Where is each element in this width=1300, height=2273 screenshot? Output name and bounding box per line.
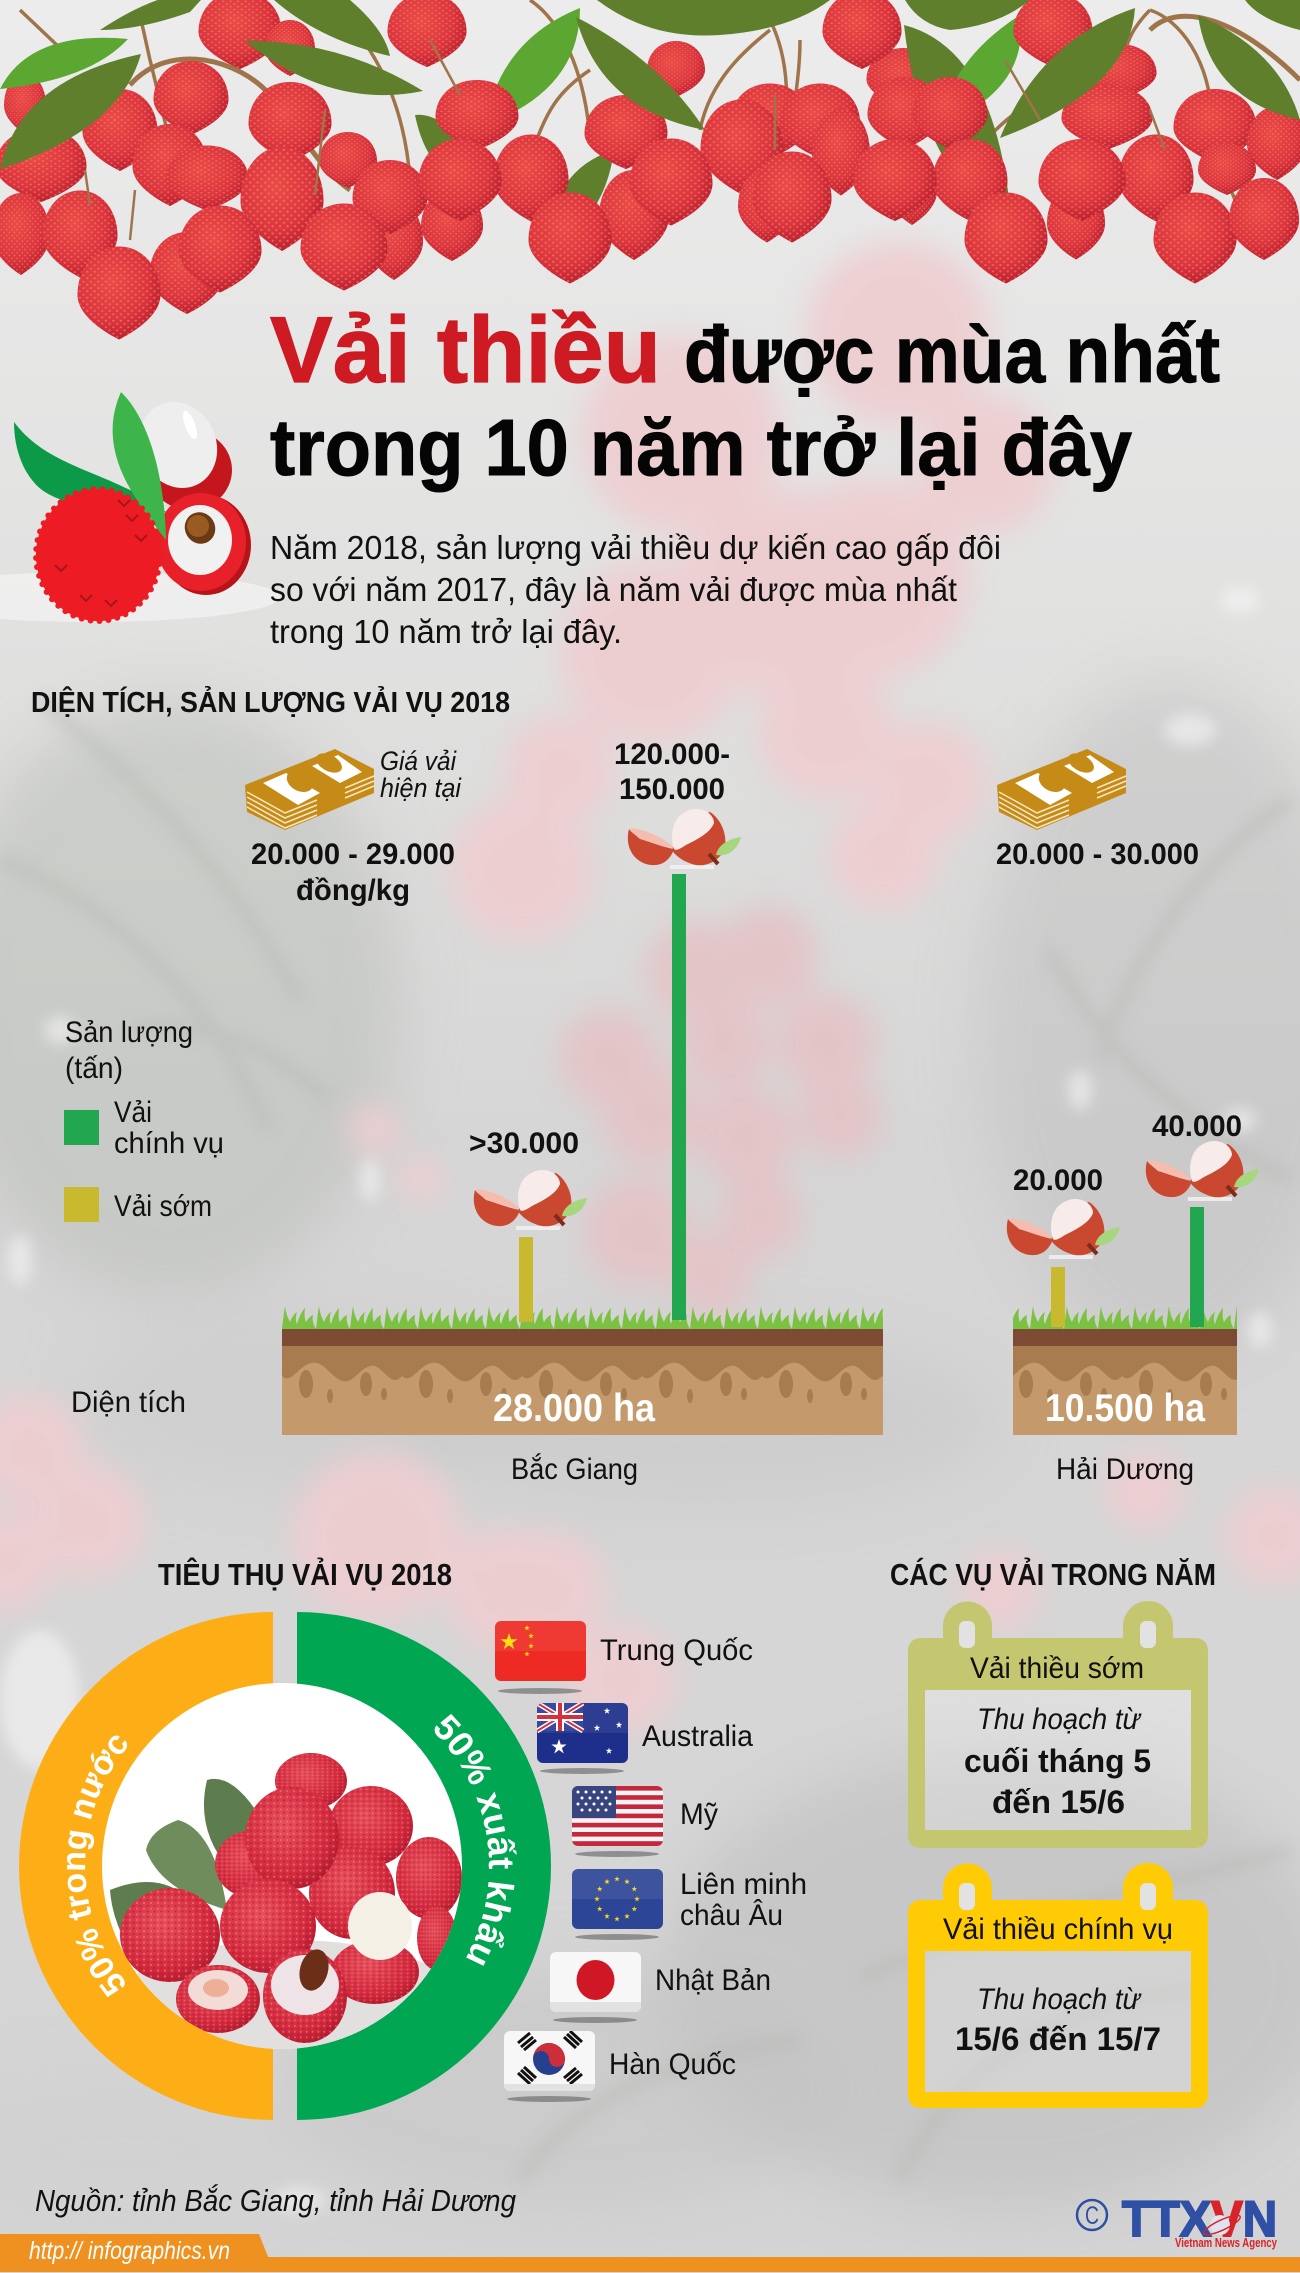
label: Trung Quốc: Trung Quốc (600, 1634, 753, 1667)
legend: chính vụ (114, 1127, 224, 1160)
area and region labels: Bắc Giang (511, 1453, 638, 1486)
calendar: early crop: cuối tháng 5 (964, 1743, 1151, 1779)
bar: Hải Dương main crop (1146, 1110, 1259, 1327)
icon: money stack left (245, 749, 374, 830)
flag: Japan (550, 1952, 641, 2023)
price block: Bắc Giang: 20.000 - 29.000 (251, 838, 455, 871)
heading: area and output: DIỆN TÍCH, SẢN LƯỢNG VẢI VỤ 2018 (31, 685, 510, 719)
label: Liên minh châu Âu (680, 1868, 807, 1932)
icon: money stack right (997, 749, 1126, 830)
intro text block (270, 529, 1001, 650)
bar: Hải Dương early crop: 20.000 (1013, 1164, 1103, 1197)
calendar: early crop: đến 15/6 (992, 1784, 1125, 1820)
area and region labels: Diện tích (71, 1386, 186, 1419)
title (270, 297, 1220, 492)
calendar: main crop: Thu hoạch từ (977, 1983, 1142, 2016)
bar: Hải Dương main crop: 40.000 (1152, 1110, 1242, 1143)
label: domestic share: 50% trong nước (66, 1736, 127, 1998)
label: export share: 50% xuất khẩu (434, 1714, 517, 1966)
bar: Bắc Giang main crop (614, 738, 741, 1320)
icon: lychee with leaves (0, 389, 280, 622)
footer bar with url: http:// infographics.vn (29, 2237, 230, 2265)
bar: Bắc Giang early crop: >30.000 (469, 1127, 579, 1160)
intro text block: Năm 2018, sản lượng vải thiều dự kiến cao gấp đôi (270, 529, 1001, 566)
intro text block: so với năm 2017, đây là năm vải được mùa nhất (270, 571, 957, 608)
area and region labels: Hải Dương (1056, 1453, 1194, 1486)
title: được mùa nhất (684, 310, 1220, 399)
label: Liên minh châu Âu: châu Âu (680, 1899, 783, 1932)
legend: (tấn) (65, 1052, 123, 1085)
price block: Hải Dương (996, 749, 1199, 871)
ground: Bắc Giang (282, 1304, 883, 1435)
illustration: hanging lychee branches (0, 0, 1300, 340)
source note: Nguồn: tỉnh Bắc Giang, tỉnh Hải Dương (35, 2183, 516, 2218)
calendar: early crop: Vải thiều sớm (970, 1652, 1144, 1685)
legend: Vải (114, 1096, 152, 1129)
intro text block: trong 10 năm trở lại đây. (270, 613, 622, 650)
heading: crop seasons: CÁC VỤ VẢI TRONG NĂM (890, 1557, 1216, 1592)
label: Nhật Bản: Nhật Bản (655, 1964, 771, 1997)
flag: USA (572, 1786, 663, 1857)
legend (64, 1016, 224, 1223)
ground: Bắc Giang: 28.000 ha (493, 1387, 655, 1430)
label: domestic share (66, 1736, 127, 1998)
footer bar with url (0, 2234, 1300, 2272)
bar: Bắc Giang main crop: 150.000 (619, 773, 725, 806)
flag: China (495, 1621, 586, 1694)
label: Hàn Quốc: Hàn Quốc (609, 2048, 736, 2081)
calendar: main crop: 15/6 đến 15/7 (955, 2021, 1161, 2057)
logo: TTXVN: TTXVN (1122, 2191, 1277, 2247)
calendar: early crop (908, 1601, 1208, 1848)
price block: Bắc Giang: đồng/kg (296, 874, 410, 907)
flag: EU (572, 1869, 663, 1940)
flag: South Korea (504, 2031, 595, 2102)
price block: Bắc Giang: Giá vải (380, 746, 457, 776)
bar: Hải Dương early crop (1007, 1164, 1120, 1327)
ground: Hải Dương: 10.500 ha (1045, 1387, 1205, 1430)
logo: TTXVN: C (1085, 2202, 1099, 2230)
calendar: main crop: Vải thiều chính vụ (943, 1913, 1173, 1946)
price block: Hải Dương: 20.000 - 30.000 (996, 838, 1199, 871)
front leaves (0, 8, 1300, 169)
legend: Sản lượng (65, 1016, 193, 1049)
area and region labels (71, 1386, 1194, 1486)
title: trong 10 năm trở lại đây (270, 403, 1132, 492)
label: Australia: Australia (642, 1720, 753, 1753)
title: Vải thiều (270, 297, 661, 402)
flag: Australia (537, 1703, 628, 1774)
label: Liên minh châu Âu: Liên minh (680, 1868, 807, 1901)
price block: Bắc Giang (245, 746, 462, 907)
photo: lychees (110, 1753, 462, 2060)
back leaves (100, 0, 1300, 250)
bar: Bắc Giang main crop: 120.000- (614, 738, 730, 771)
label: Mỹ: Mỹ (680, 1798, 718, 1831)
calendar: early crop: Thu hoạch từ (977, 1703, 1142, 1736)
ground: Hải Dương (1013, 1304, 1237, 1435)
calendar: main crop (908, 1863, 1208, 2108)
bar: Bắc Giang early crop (469, 1127, 587, 1322)
donut chart: consumption split (19, 1612, 551, 2120)
legend: Vải sớm (114, 1190, 212, 1223)
heading: consumption: TIÊU THỤ VẢI VỤ 2018 (158, 1556, 452, 1592)
price block: Bắc Giang: hiện tại (380, 773, 462, 803)
